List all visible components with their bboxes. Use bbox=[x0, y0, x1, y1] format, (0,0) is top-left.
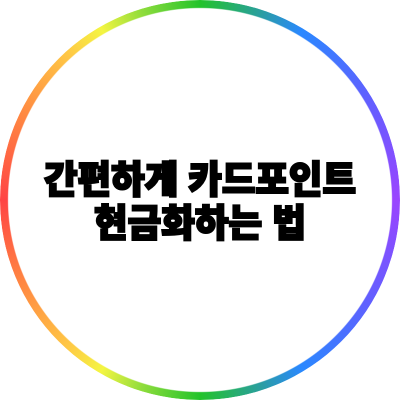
title line 2: 현금화하는 법 bbox=[94, 204, 306, 246]
title line 1: 간편하게 카드포인트 bbox=[44, 160, 356, 202]
